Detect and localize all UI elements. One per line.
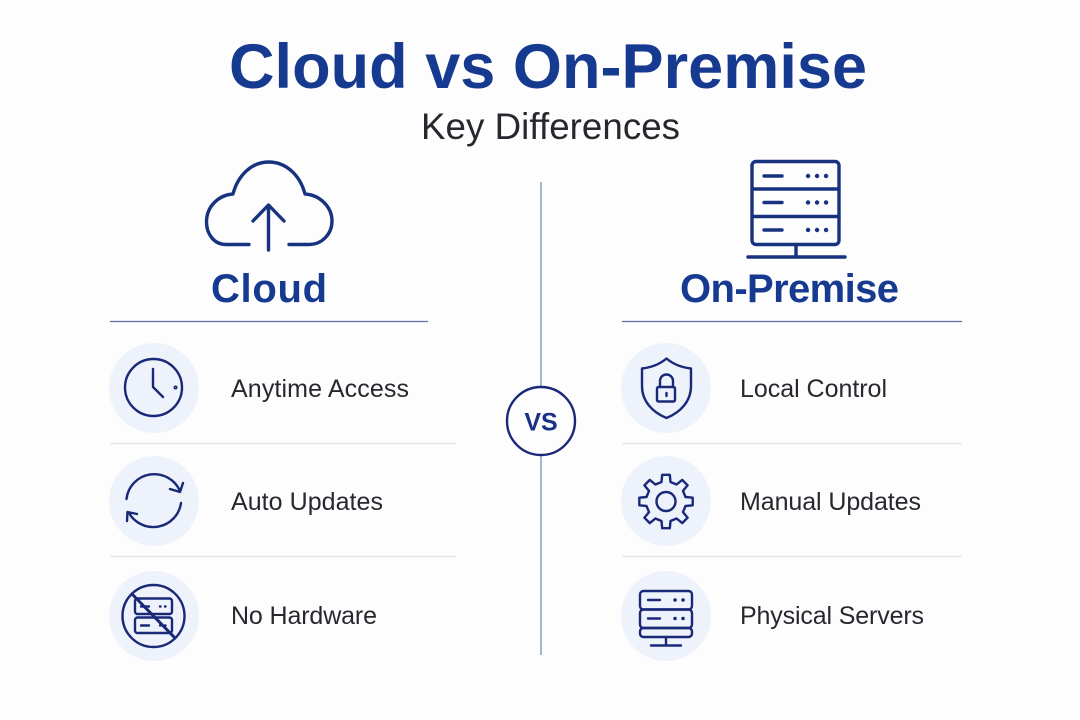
row: Anytime Access	[109, 343, 409, 433]
VS badge: VS	[524, 408, 558, 436]
row: Auto Updates: Auto Updates	[231, 488, 383, 516]
heading: Cloud: Cloud	[211, 267, 327, 311]
icon: no hardware	[122, 585, 184, 647]
row: Anytime Access: Anytime Access	[231, 375, 409, 403]
row: Local Control	[621, 343, 887, 433]
center divider with VS badge	[507, 182, 575, 655]
row: No Hardware: No Hardware	[231, 602, 377, 630]
row: Manual Updates: Manual Updates	[740, 488, 921, 516]
row: Local Control: Local Control	[740, 375, 887, 403]
row: Physical Servers: Physical Servers	[740, 602, 924, 630]
icon: clock	[125, 359, 182, 416]
icon: gear	[639, 475, 693, 528]
panel: cloud	[109, 162, 456, 661]
heading: On-Premise: On-Premise	[680, 267, 899, 311]
panel: on-premise	[621, 162, 962, 661]
subtitle: Key Differences	[421, 106, 680, 147]
row: Manual Updates	[621, 456, 921, 546]
row: Physical Servers	[621, 571, 924, 661]
title: Cloud vs On-Premise	[229, 32, 867, 102]
icon: sync arrows	[126, 474, 183, 527]
row: Auto Updates	[109, 456, 383, 546]
icon: physical server	[640, 591, 692, 646]
icon: cloud upload	[206, 162, 332, 250]
row: No Hardware	[109, 571, 377, 661]
icon: shield lock	[642, 358, 691, 418]
VS badge	[507, 387, 575, 455]
icon: server rack	[748, 162, 845, 257]
